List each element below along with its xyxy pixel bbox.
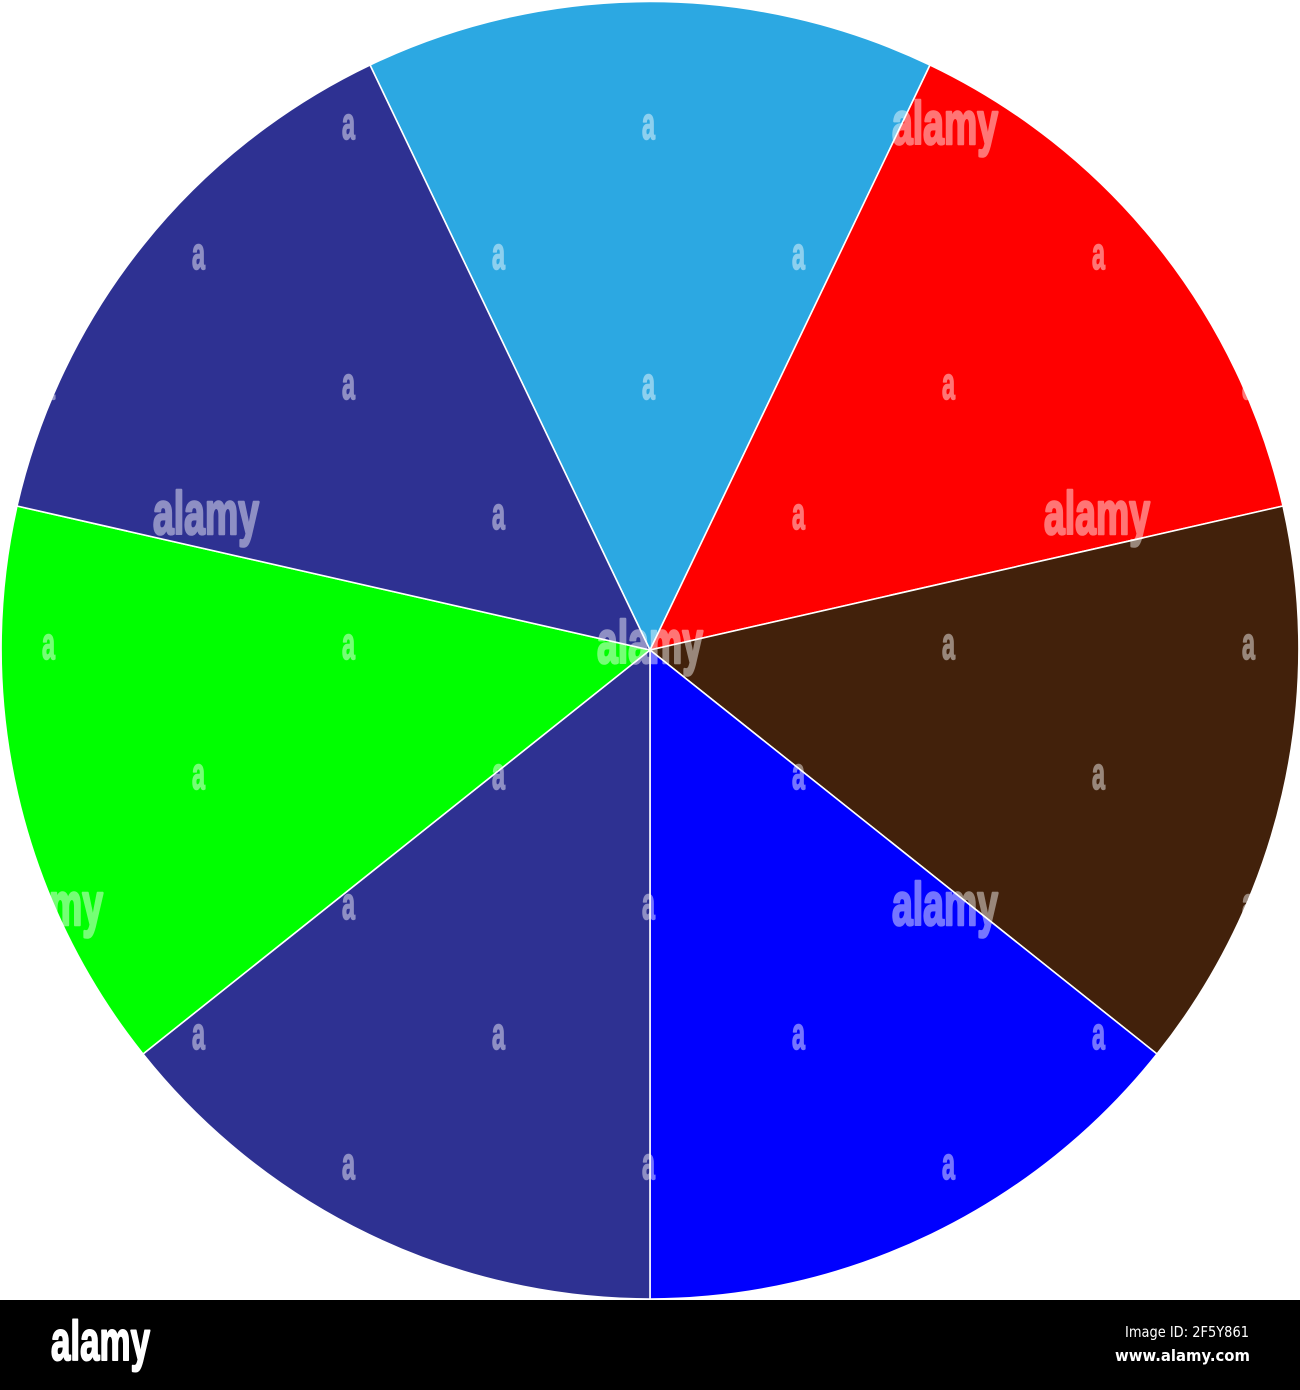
segment: navy bottom <box>143 650 650 1299</box>
segment: navy top <box>17 65 650 650</box>
watermark pattern: a <box>642 358 656 409</box>
watermark pattern: a <box>42 618 56 669</box>
watermark pattern: a <box>792 228 806 279</box>
segment: green <box>1 506 650 1054</box>
watermark pattern: a <box>192 1008 206 1059</box>
watermark pattern: a <box>342 1138 356 1189</box>
watermark pattern <box>0 90 1256 1189</box>
watermark pattern: a <box>792 1008 806 1059</box>
footer bar <box>0 1300 1300 1390</box>
watermark pattern: a <box>642 1138 656 1189</box>
watermark pattern: a <box>1242 618 1256 669</box>
watermark pattern: alamy <box>892 90 998 157</box>
watermark pattern: alamy <box>153 480 259 547</box>
watermark pattern: alamy <box>597 609 703 676</box>
watermark pattern: a <box>492 748 506 799</box>
segment: red <box>650 65 1283 650</box>
watermark pattern: a <box>1242 878 1256 929</box>
watermark pattern: a <box>642 98 656 149</box>
watermark pattern: alamy <box>0 871 103 938</box>
watermark pattern: a <box>1092 748 1106 799</box>
watermark pattern: a <box>642 878 656 929</box>
watermark pattern: a <box>1092 228 1106 279</box>
segment: brown <box>650 506 1299 1054</box>
website: www.alamy.com <box>1115 1346 1250 1365</box>
watermark pattern: a <box>342 358 356 409</box>
segment: sky blue <box>370 1 930 650</box>
watermark pattern: a <box>792 488 806 539</box>
watermark pattern: a <box>492 488 506 539</box>
watermark pattern: a <box>1092 1008 1106 1059</box>
watermark pattern: a <box>342 878 356 929</box>
watermark pattern: a <box>492 228 506 279</box>
watermark pattern: alamy <box>1044 480 1150 547</box>
watermark pattern: a <box>942 618 956 669</box>
image id: Image ID: 2F5Y861 <box>1125 1323 1249 1341</box>
footer logo: alamy <box>51 1309 150 1372</box>
watermark pattern: a <box>942 1138 956 1189</box>
watermark pattern: a <box>342 98 356 149</box>
watermark pattern: alamy <box>892 871 998 938</box>
watermark pattern: a <box>942 358 956 409</box>
watermark pattern: a <box>192 748 206 799</box>
watermark pattern: a <box>42 358 56 409</box>
segment: blue <box>650 650 1157 1299</box>
watermark pattern: a <box>192 228 206 279</box>
watermark pattern: a <box>1242 358 1256 409</box>
watermark pattern: a <box>792 748 806 799</box>
watermark pattern: a <box>342 618 356 669</box>
watermark pattern: a <box>492 1008 506 1059</box>
